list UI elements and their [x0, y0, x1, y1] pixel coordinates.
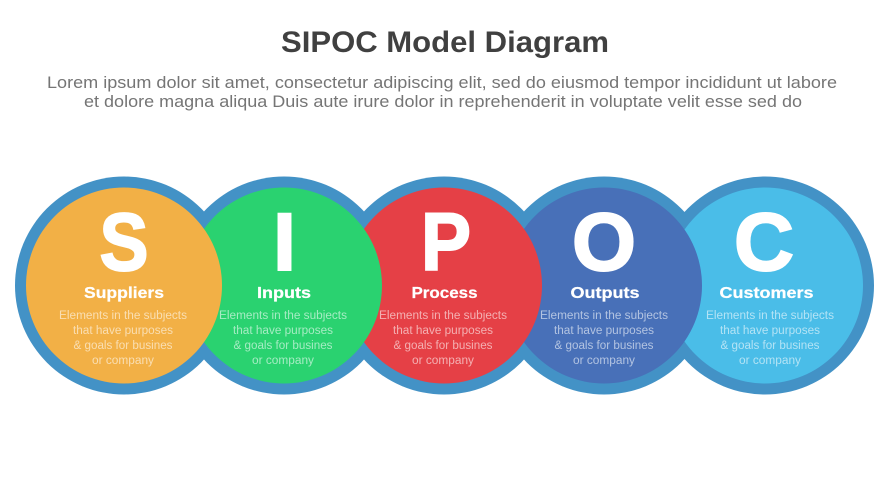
panel: outputs: Elements in the subjects — [540, 310, 668, 322]
subtitle: et dolore magna aliqua Duis aute irure dolor in reprehenderit in voluptate velit esse sed do — [84, 93, 802, 111]
panel: inputs: I — [273, 197, 296, 288]
panel: suppliers: & goals for busines — [74, 340, 173, 352]
subtitle: Lorem ipsum dolor sit amet, consectetur adipiscing elit, sed do eiusmod tempor incididunt ut labore — [47, 74, 837, 92]
subtitle — [47, 74, 837, 111]
panel: suppliers: that have purposes — [73, 325, 173, 337]
panel: suppliers: or company — [92, 355, 154, 367]
panel: suppliers: Suppliers — [84, 285, 164, 302]
panel: outputs: & goals for busines — [554, 340, 654, 352]
panel: process: Elements in the subjects — [379, 310, 507, 322]
panel: process: & goals for busines — [394, 340, 493, 352]
panel: process — [346, 188, 542, 384]
panel: outputs: O — [572, 197, 636, 288]
panel: suppliers — [26, 188, 222, 384]
panel: customers: that have purposes — [720, 325, 820, 337]
panel: inputs — [186, 188, 382, 384]
panel: customers — [667, 188, 863, 384]
panel: outputs: or company — [573, 355, 635, 367]
panel: customers: C — [734, 197, 794, 288]
panel: suppliers: Elements in the subjects — [59, 310, 187, 322]
panel: process: Process — [412, 285, 478, 302]
panel: inputs: & goals for busines — [234, 340, 333, 352]
panel: customers: Customers — [720, 285, 814, 302]
panel: process: or company — [412, 355, 474, 367]
panel: inputs: or company — [252, 355, 314, 367]
panel: outputs: that have purposes — [554, 325, 654, 337]
panel: inputs: Inputs — [257, 285, 311, 302]
panel: inputs: Elements in the subjects — [219, 310, 347, 322]
panel: suppliers: S — [100, 197, 148, 288]
panel: customers: or company — [739, 355, 801, 367]
panel: outputs: Outputs — [570, 285, 640, 302]
panel: inputs: that have purposes — [233, 325, 333, 337]
panel: process: that have purposes — [393, 325, 493, 337]
panel: customers: & goals for busines — [720, 340, 820, 352]
panel: process: P — [421, 197, 471, 288]
outer blue rings — [15, 176, 874, 394]
panel: customers: Elements in the subjects — [706, 310, 834, 322]
panel: outputs — [506, 188, 702, 384]
title: SIPOC Model Diagram — [281, 26, 609, 59]
